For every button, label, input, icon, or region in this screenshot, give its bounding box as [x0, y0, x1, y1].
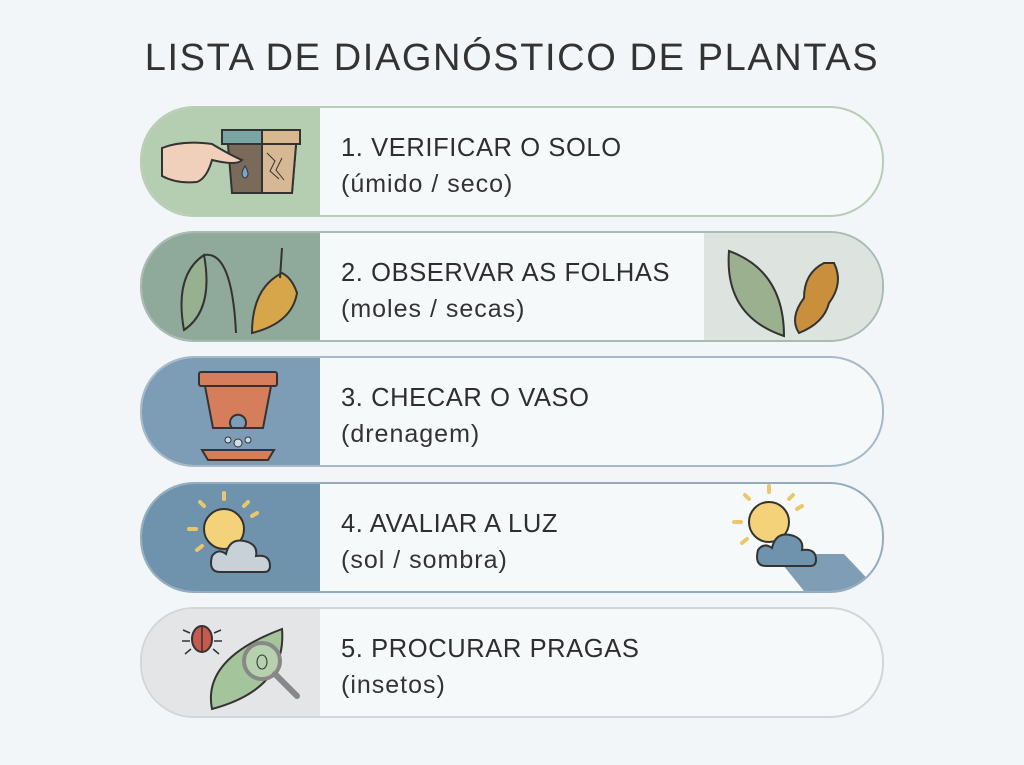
title: LISTA DE DIAGNÓSTICO DE PLANTAS — [145, 37, 879, 79]
text block 5: 5. PROCURAR PRAGAS — [341, 635, 639, 663]
icon: drooping and dry leaf — [142, 233, 320, 340]
text block 2 — [341, 259, 670, 323]
text block 3: (drenagem) — [341, 420, 480, 448]
text block 1: (úmido / seco) — [341, 170, 513, 198]
panel: row 3 pot — [140, 356, 884, 467]
text block 3: 3. CHECAR O VASO — [341, 384, 590, 412]
panel: row 4 light — [140, 482, 884, 593]
icon: right sun and cloud — [732, 484, 866, 591]
text block 3 — [341, 384, 590, 448]
text block 1 — [341, 134, 622, 198]
icon: sun and cloud — [142, 484, 320, 591]
text block 4: 4. AVALIAR A LUZ — [341, 510, 558, 538]
text block 4 — [341, 510, 558, 574]
text block 4: (sol / sombra) — [341, 546, 508, 574]
panel: row 5 pests — [140, 607, 884, 718]
icon: pot drainage — [142, 358, 320, 465]
text block 5: (insetos) — [341, 671, 446, 699]
text block 2: (moles / secas) — [341, 295, 525, 323]
text block 1: 1. VERIFICAR O SOLO — [341, 134, 622, 162]
icon: bug and leaf magnifier — [142, 609, 320, 716]
text block 2: 2. OBSERVAR AS FOLHAS — [341, 259, 670, 287]
text block 5 — [341, 635, 639, 699]
panel: row 1 soil — [140, 106, 884, 217]
icon: finger and pot — [142, 108, 320, 215]
icon: right leaves panel — [704, 233, 882, 340]
panel: row 2 leaves — [140, 231, 884, 342]
